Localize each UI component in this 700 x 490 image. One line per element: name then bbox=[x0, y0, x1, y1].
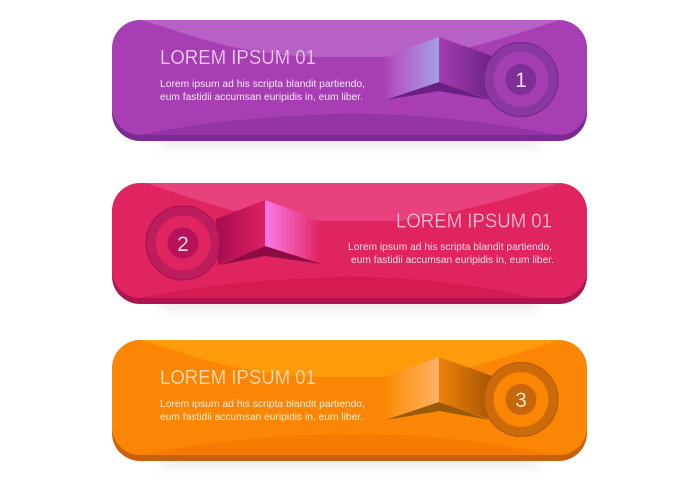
body text: Lorem ipsum ad his scripta blandit partiendo, bbox=[160, 398, 365, 410]
number badge 3 bbox=[484, 362, 558, 436]
banner face bbox=[112, 183, 587, 298]
heading: LOREM IPSUM 01 bbox=[160, 366, 316, 389]
body text: Lorem ipsum ad his scripta blandit partiendo, bbox=[348, 241, 552, 253]
body text bbox=[160, 78, 365, 103]
banner face bbox=[112, 340, 587, 455]
banner edge bbox=[112, 26, 587, 141]
body text: eum fastidii accumsan euripidis in, eum liber. bbox=[351, 254, 554, 266]
light top band bbox=[145, 183, 560, 221]
light top band bbox=[140, 20, 560, 57]
banner face bbox=[112, 20, 587, 135]
banner edge bbox=[112, 346, 587, 461]
body text: Lorem ipsum ad his scripta blandit partiendo, bbox=[160, 78, 365, 90]
body text bbox=[160, 398, 365, 423]
heading: LOREM IPSUM 01 bbox=[160, 46, 316, 69]
body text bbox=[348, 241, 554, 266]
dark bottom band bbox=[140, 114, 560, 135]
number badge 3: 3 bbox=[515, 389, 527, 412]
heading: LOREM IPSUM 01 bbox=[396, 210, 552, 232]
panel: pink banner 2 bbox=[112, 183, 587, 309]
body text: eum fastidii accumsan euripidis in, eum liber. bbox=[160, 411, 363, 423]
number badge 1 bbox=[484, 42, 558, 116]
panel: orange banner 3 bbox=[112, 340, 587, 466]
dark bottom band bbox=[140, 434, 560, 455]
number badge 1: 1 bbox=[515, 69, 527, 92]
body text: eum fastidii accumsan euripidis in, eum liber. bbox=[160, 91, 363, 103]
folded ribbon bbox=[383, 37, 492, 100]
folded ribbon bbox=[383, 357, 492, 420]
number badge 2 bbox=[146, 206, 220, 280]
banner edge bbox=[112, 189, 587, 304]
dark bottom band bbox=[140, 277, 537, 298]
number badge 2: 2 bbox=[177, 233, 189, 256]
light top band bbox=[140, 340, 560, 377]
folded ribbon bbox=[216, 200, 322, 265]
panel: purple banner 1 bbox=[112, 20, 587, 146]
